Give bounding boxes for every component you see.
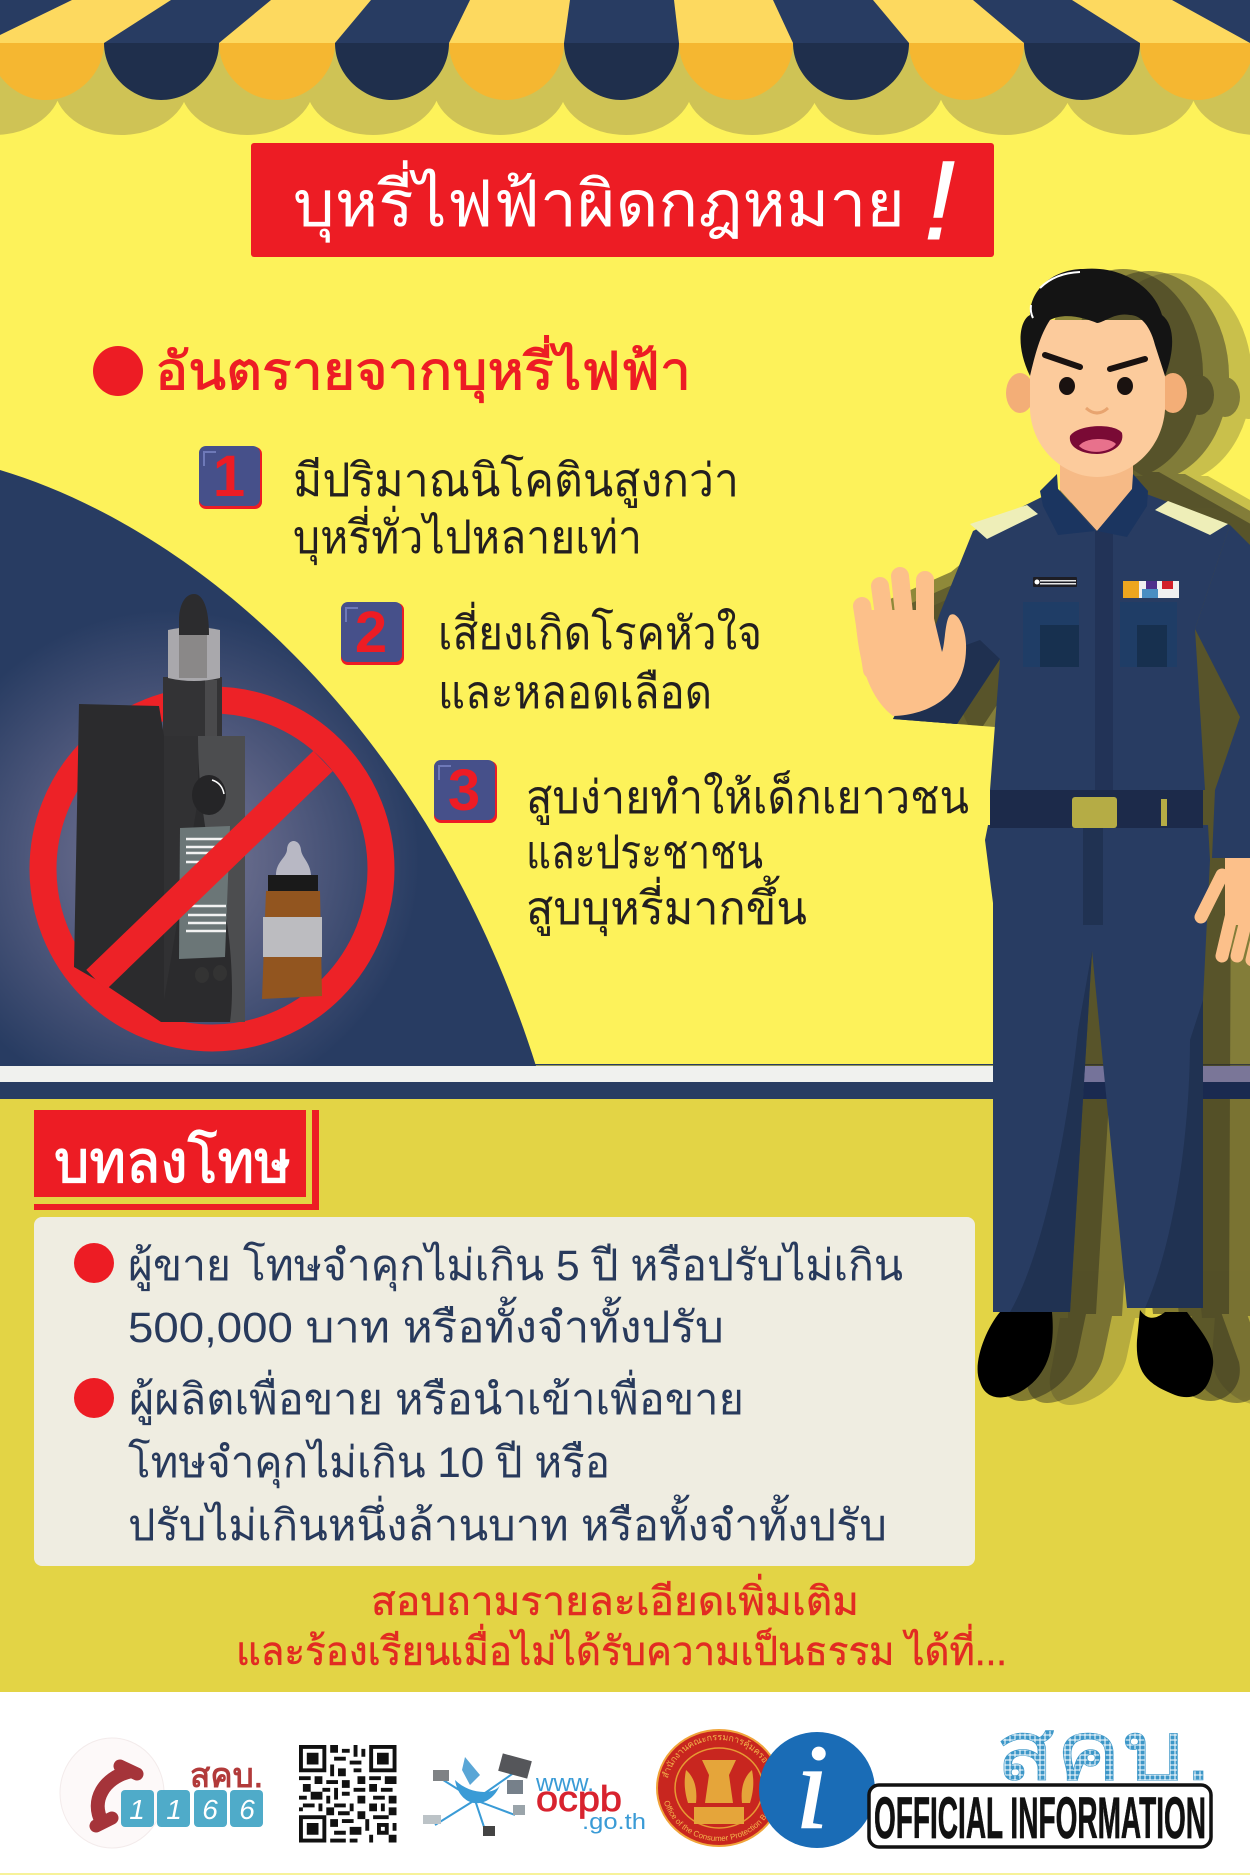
penalties heading [34, 1110, 319, 1210]
producer penalty text: ผู้ผลิตเพื่อขาย หรือนำเข้าเพื่อขาย [129, 1370, 744, 1426]
badge 2 [341, 600, 404, 665]
number tiles: 1 [166, 1794, 182, 1825]
eyes [1059, 377, 1133, 395]
item 1 [199, 444, 739, 566]
item 2 [341, 600, 762, 718]
heading box [34, 1110, 306, 1197]
item 2 text: เสี่ยงเกิดโรคหัวใจ [438, 601, 762, 659]
shoes [978, 1310, 1213, 1397]
number tiles: 6 [202, 1794, 218, 1825]
navy curved panel [0, 470, 536, 1066]
neck [1060, 450, 1133, 531]
badge 3 [434, 758, 497, 823]
prohibition slash [96, 761, 323, 980]
breast pockets [1023, 602, 1177, 667]
info icon [759, 1720, 875, 1855]
name tag [1033, 577, 1077, 587]
e-cigarette device [74, 594, 245, 1022]
footer [0, 1692, 1250, 1875]
no-vaping sign [43, 594, 381, 1038]
exclamation mark: ! [924, 138, 955, 263]
medal ribbons [1123, 581, 1179, 598]
raised hand [856, 576, 1000, 724]
seal ring text: สำนักงานคณะกรรมการคุ้มครองผู้บริโภค [662, 1735, 767, 1778]
penalties panel [34, 1217, 975, 1566]
mouth [1070, 426, 1122, 454]
title text: บุหรี่ไฟฟ้าผิดกฎหมาย [293, 160, 905, 243]
website address: www. [535, 1770, 594, 1797]
awning hem scallops [0, 43, 1250, 100]
number tiles [121, 1790, 263, 1827]
bullet: seller [74, 1243, 114, 1283]
epaulettes [970, 501, 1228, 539]
right arm and hand [1195, 525, 1250, 960]
contact call to action: และร้องเรียนเมื่อไม่ได้รับความเป็นธรรม ได้ที่... [236, 1624, 1007, 1674]
seller penalty text: 500,000 บาท หรือทั้งจำทั้งปรับ [128, 1296, 724, 1352]
shirt [893, 474, 1230, 791]
belt [990, 790, 1203, 828]
item 2 text: และหลอดเลือด [438, 666, 712, 718]
consumer protection board seal [656, 1729, 771, 1847]
title banner [251, 138, 994, 263]
prohibition ring [43, 700, 381, 1038]
number tiles: 1 [129, 1794, 145, 1825]
producer penalty text: ปรับไม่เกินหนึ่งล้านบาท หรือทั้งจำทั้งปรับ [128, 1494, 887, 1550]
awning navy stripes [0, 0, 1250, 43]
hotline logo [60, 1738, 263, 1848]
item 3 text: สูบบุหรี่มากขึ้น [526, 875, 807, 937]
website logo [423, 1753, 646, 1836]
awning navy hem [104, 43, 1140, 100]
item 3 [434, 758, 969, 937]
pocket flaps [1040, 625, 1167, 667]
producer penalty text: โทษจำคุกไม่เกิน 10 ปี หรือ [128, 1438, 610, 1489]
nose [1086, 408, 1108, 413]
item 1 text: มีปริมาณนิโคตินสูงกว่า [293, 454, 739, 508]
agency logo dotted: สคบ. [995, 1704, 1212, 1798]
hair highlights [1031, 272, 1080, 318]
head [1006, 269, 1187, 477]
e-liquid bottle [262, 841, 322, 999]
seal emblem [685, 1760, 753, 1824]
number tiles: 6 [239, 1794, 255, 1825]
officer shadow [879, 269, 1250, 1405]
badge 1: 1 [213, 444, 245, 509]
badge 3: 3 [448, 758, 480, 823]
item 3 text: และประชาชน [526, 826, 763, 878]
bullet: producer [74, 1378, 114, 1418]
awning [0, 0, 1250, 135]
stripe tint through shadow [1075, 1066, 1250, 1099]
info icon: i [795, 1720, 829, 1855]
officer [856, 269, 1250, 1397]
website domain: .go.th [582, 1809, 646, 1834]
seller penalty text: ผู้ขาย โทษจำคุกไม่เกิน 5 ปี หรือปรับไม่เกิน [128, 1241, 903, 1292]
QR code [299, 1745, 396, 1842]
eyebrows [1045, 355, 1145, 369]
item 3 text: สูบง่ายทำให้เด็กเยาวชน [526, 770, 969, 825]
network hub icon [423, 1753, 532, 1836]
heading text: บทลงโทษ [54, 1129, 291, 1195]
counter stripe [0, 1064, 1250, 1099]
hotline label: สคบ. [190, 1757, 263, 1795]
logo circle [60, 1738, 164, 1848]
lower band [0, 1099, 1250, 1692]
heading text: อันตรายจากบุหรี่ไฟฟ้า [155, 335, 691, 403]
ears [1006, 373, 1187, 413]
website name: ocpb [536, 1778, 622, 1819]
seal ring text english: Office of the Consumer Protection Board [664, 1800, 766, 1842]
badge 2: 2 [355, 600, 387, 665]
awning shadow scallops [0, 0, 1250, 135]
trousers [985, 825, 1210, 1312]
hair [1021, 269, 1172, 376]
badge 1 [199, 444, 262, 509]
face [1030, 320, 1165, 477]
item 1 text: บุหรี่ทั่วไปหลายเท่า [293, 505, 642, 566]
section heading [93, 335, 691, 403]
heading bullet [93, 346, 143, 396]
awning yellow stripes [0, 0, 1250, 44]
collar [1040, 474, 1148, 537]
heading offset frame [34, 1110, 319, 1210]
phone handset [96, 1766, 137, 1826]
contact call to action: สอบถามรายละเอียดเพิ่มเติม [371, 1574, 859, 1624]
tongue [1079, 439, 1116, 452]
